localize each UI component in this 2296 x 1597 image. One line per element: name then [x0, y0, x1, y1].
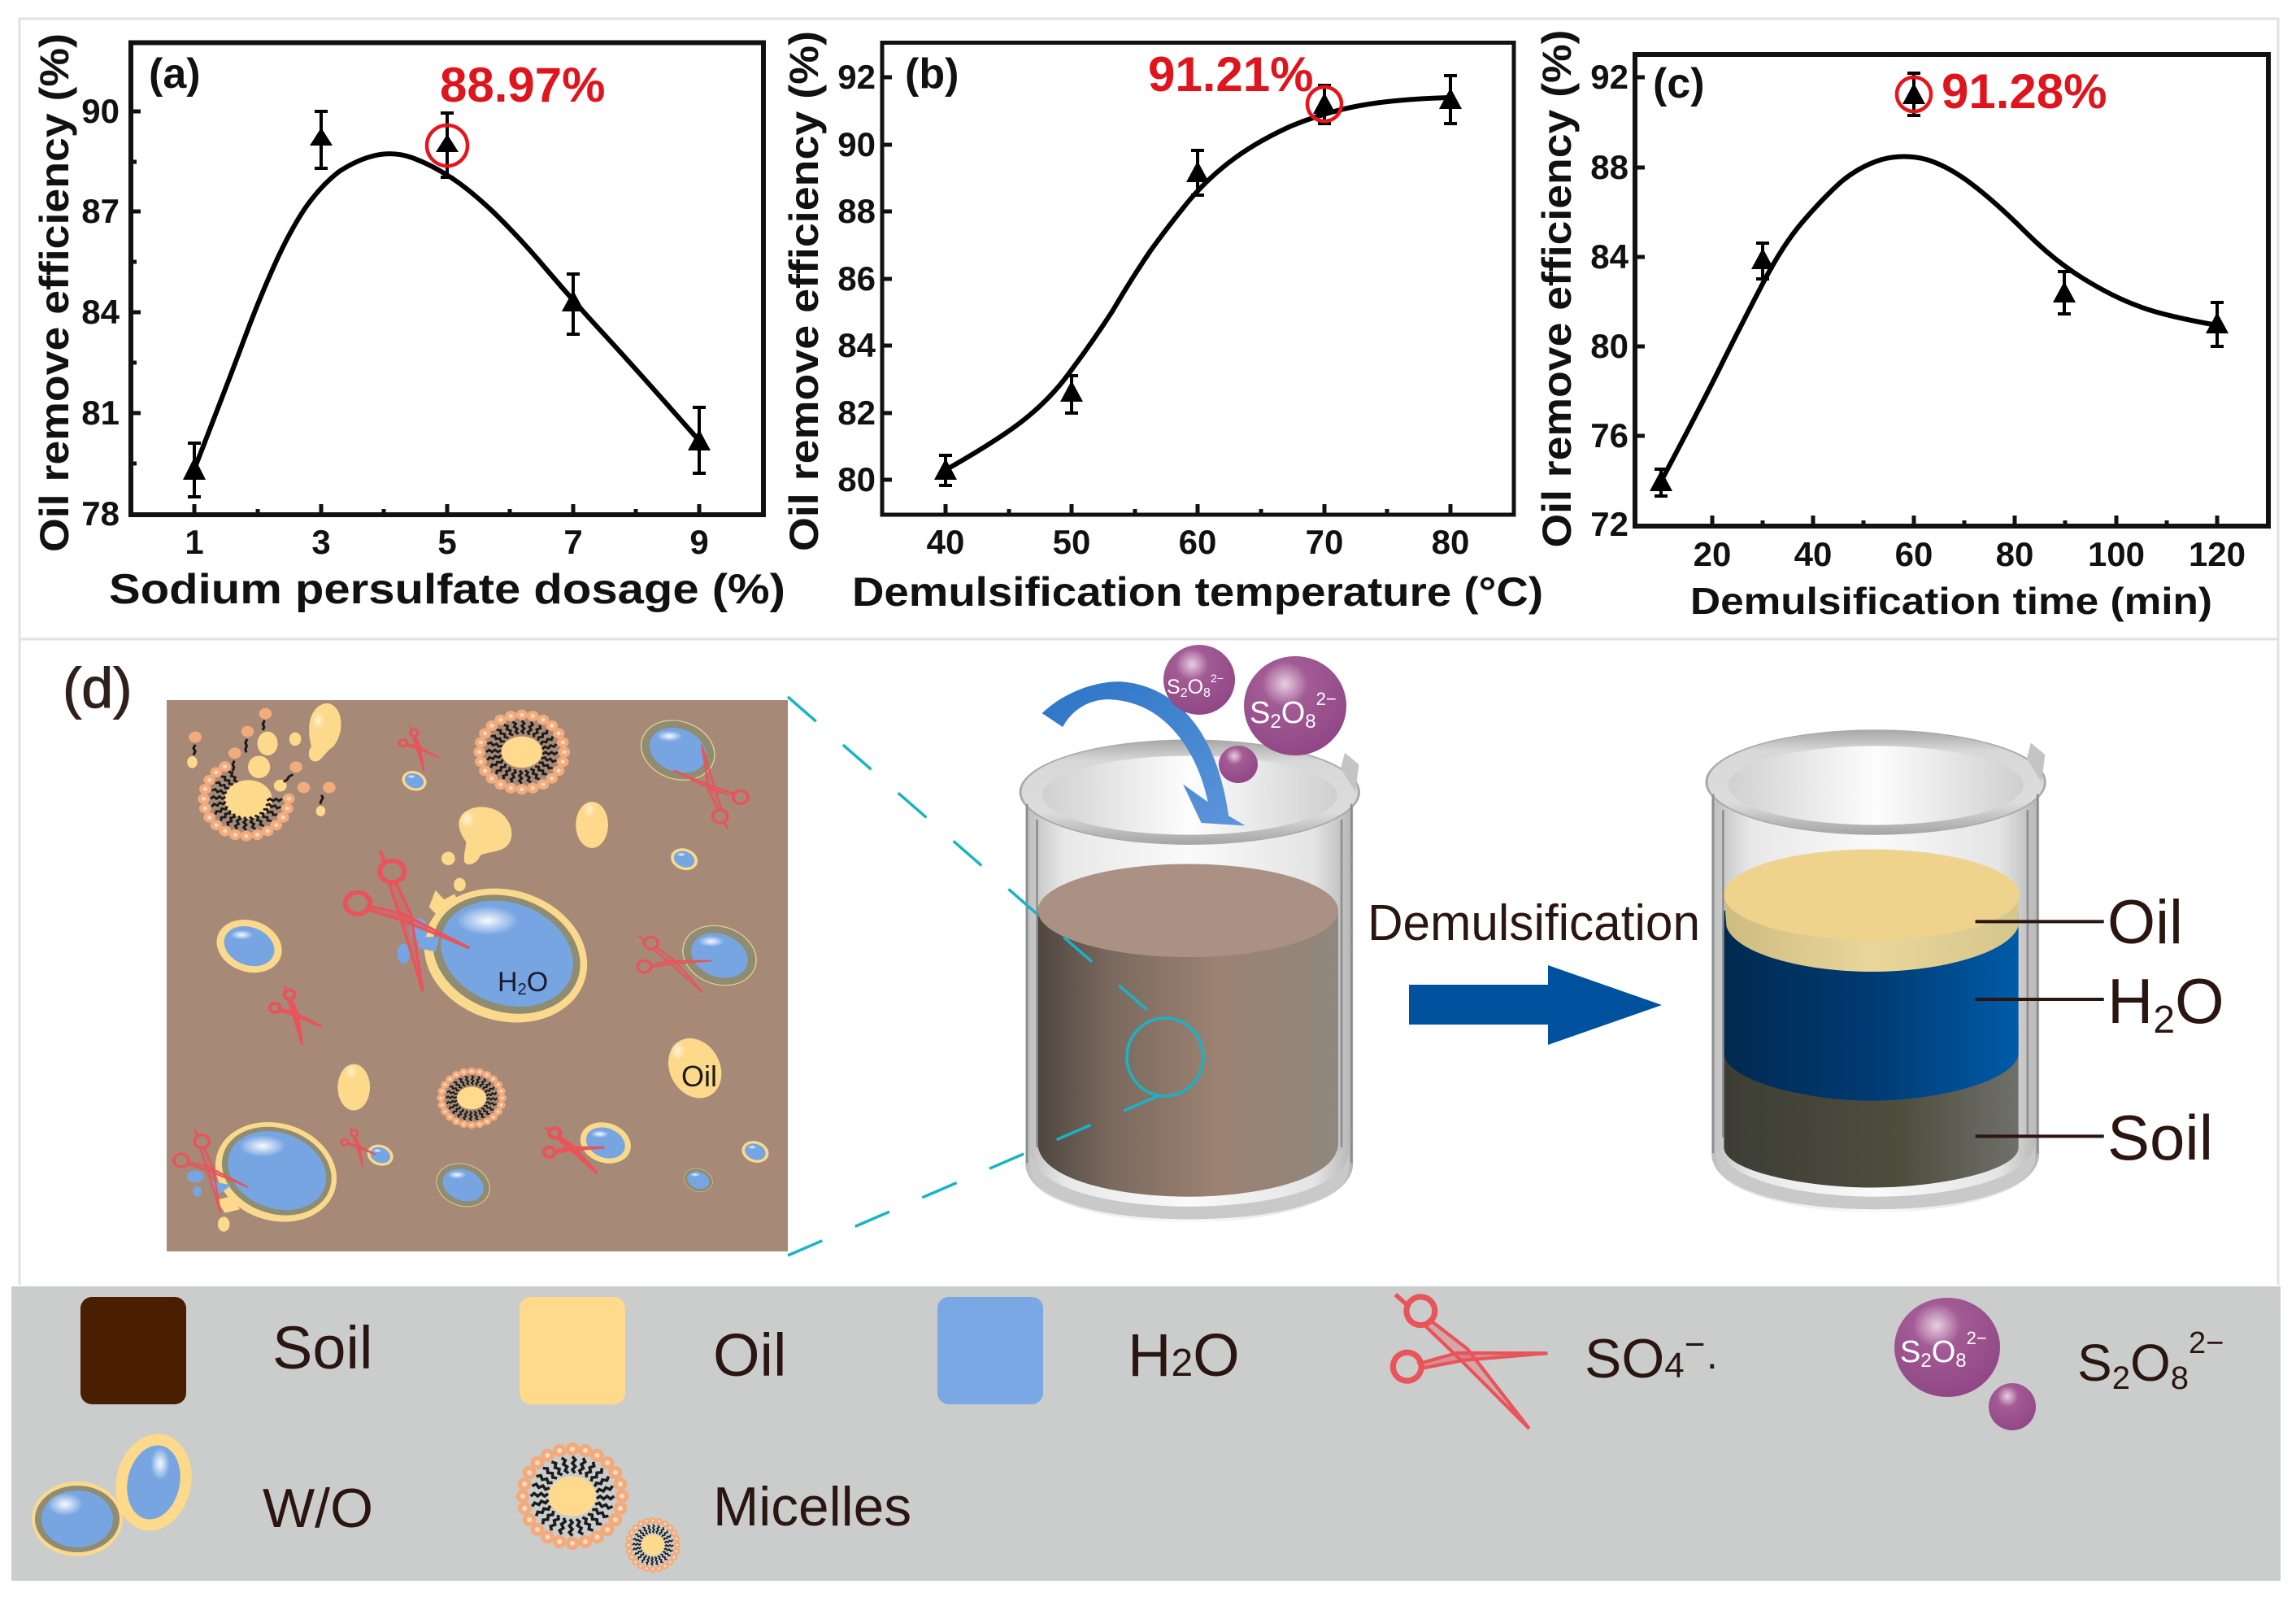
legend icon: persulfate spheres: S: [1900, 1335, 1920, 1369]
y tick labels (a): [81, 92, 120, 533]
legend icon: W/O droplets: [32, 1427, 200, 1556]
x tick labels (c): 80: [1996, 535, 2033, 573]
panel tag (d): (d): [63, 656, 133, 720]
y axis label (b): Oil remove efficiency (%): [781, 31, 827, 551]
y tick labels (a): 90: [81, 92, 120, 130]
oil layer: [1724, 894, 2019, 972]
legend text: W/O: W/O: [263, 1477, 373, 1539]
y tick labels (b): 80: [837, 460, 876, 498]
y tick labels (b): 92: [837, 58, 876, 96]
data markers (c): [1650, 83, 2229, 491]
legend text: oil: Oil: [713, 1321, 786, 1389]
data markers (a): [183, 128, 711, 480]
sphere: large: [1244, 656, 1346, 755]
soil background square: [167, 700, 788, 1251]
label: H2O in droplet: H: [498, 967, 518, 998]
y tick labels (a): 84: [81, 293, 120, 331]
fitted curve (b): [946, 98, 1450, 470]
legend text: water: H2O: [1128, 1321, 1240, 1389]
label: H2O layer: O: [2175, 965, 2224, 1037]
y tick labels (b): 86: [837, 259, 876, 298]
x tick labels (a): [185, 523, 709, 561]
panel: (b) demulsification temperature chart: [781, 31, 1543, 615]
x tick labels (b): 60: [1179, 523, 1216, 561]
x tick labels (b): 40: [927, 523, 964, 561]
y tick labels (a): 81: [81, 394, 120, 432]
y tick labels (c): 84: [1590, 237, 1629, 276]
legend icon: persulfate spheres: [1894, 1298, 2036, 1430]
legend icon: persulfate spheres: 2: [1920, 1350, 1932, 1372]
label: H2O layer: H: [2107, 965, 2153, 1037]
y tick labels (b): [837, 58, 876, 498]
y tick labels (c): 76: [1590, 416, 1629, 455]
legend icon: micelles: [515, 1443, 681, 1573]
legend icon: persulfate spheres: 2−: [1967, 1328, 1987, 1348]
error bars (c): [1655, 73, 2224, 496]
y tick labels (b): 90: [837, 125, 876, 163]
value callout (a): 88.97%: [440, 58, 605, 112]
legend text: sulfate radical: −: [1685, 1325, 1705, 1364]
legend text: soil: Soil: [272, 1314, 372, 1382]
x tick labels (a): 1: [185, 523, 204, 561]
beaker: emulsion with persulfate: [1020, 681, 1359, 1222]
plot frame (b): [882, 42, 1514, 515]
sphere: tiny: [1219, 746, 1258, 783]
sphere label large: 2: [1270, 711, 1281, 733]
emulsion particles: [174, 703, 773, 1242]
sphere label medium: 8: [1203, 686, 1211, 700]
highlight circle (a): [427, 125, 467, 166]
y axis label (a): Oil remove efficiency (%): [32, 33, 77, 552]
persulfate spheres: [1163, 645, 1346, 783]
y tick labels (a): 78: [81, 494, 120, 533]
legend text: persulfate: O: [2130, 1334, 2171, 1392]
panel tag (b): (b): [905, 50, 959, 98]
zoom lines and circle: [788, 697, 1203, 1255]
water layer: [1724, 911, 2019, 1101]
value callout (b): 91.21%: [1148, 47, 1314, 102]
sphere label medium: O: [1188, 676, 1203, 698]
x tick labels (c): 20: [1694, 535, 1731, 573]
sulfate radical scissors: [174, 726, 748, 1213]
value callout (c): 91.28%: [1942, 64, 2107, 119]
panel: microscopic emulsion view: [167, 700, 788, 1251]
soil layer: [1724, 1029, 2019, 1188]
y tick labels (c): 92: [1590, 58, 1629, 96]
x tick labels (b): [927, 523, 1469, 561]
fitted curve (c): [1661, 156, 2217, 481]
x tick labels (a): 9: [689, 523, 709, 561]
legend text: persulfate: 2−: [2189, 1326, 2224, 1360]
y axis label (c): Oil remove efficiency (%): [1534, 29, 1580, 548]
spilled water fragments: [187, 918, 440, 1197]
legend swatch: soil: [80, 1297, 186, 1404]
label: H2O layer: 2: [2153, 999, 2175, 1042]
sphere label large: 2−: [1316, 689, 1337, 709]
y tick labels (b): 82: [837, 394, 876, 432]
panel: (c) demulsification time chart: [1534, 29, 2268, 622]
sphere label large: S: [1250, 696, 1270, 730]
x axis label (a): Sodium persulfate dosage (%): [109, 566, 785, 613]
legend background: [11, 1286, 2281, 1581]
sphere label large: O: [1281, 696, 1305, 730]
fitted curve (a): [194, 154, 699, 469]
legend text: persulfate: 2: [2112, 1360, 2130, 1396]
y tick labels (a): 87: [81, 192, 120, 230]
label: Demulsification: Demulsification: [1368, 895, 1700, 951]
legend swatch: oil: [520, 1297, 625, 1404]
y tick labels (c): 88: [1590, 148, 1629, 186]
sphere: medium: [1163, 645, 1235, 715]
legend text: sulfate radical: ·: [1705, 1341, 1719, 1386]
sphere label medium: S: [1167, 676, 1181, 698]
error bars (b): [939, 76, 1457, 485]
panel tag (c): (c): [1653, 60, 1705, 107]
y tick labels (c): [1590, 58, 1629, 543]
label: Oil in droplet: Oil: [681, 1060, 717, 1093]
highlight circle (b): [1307, 87, 1342, 121]
sphere label medium: 2: [1181, 686, 1188, 700]
y tick labels (c): 72: [1590, 505, 1629, 543]
x tick labels (b): 80: [1432, 523, 1469, 561]
x tick labels (a): 5: [437, 523, 457, 561]
legend icon: persulfate spheres: 8: [1955, 1350, 1967, 1372]
y tick labels (b): 84: [837, 326, 876, 364]
label: Soil layer: Soil: [2107, 1102, 2213, 1173]
legend text: persulfate: 8: [2171, 1360, 2189, 1396]
free surfactant molecules: [189, 708, 336, 804]
plot frame (c): [1635, 54, 2268, 526]
label: H2O in droplet: 2: [518, 981, 527, 999]
x axis label (b): Demulsification temperature (°C): [852, 569, 1543, 615]
leader lines: [1976, 921, 2104, 1136]
oil droplet highlights: [312, 711, 685, 1079]
curved dosing arrow: [1042, 681, 1246, 825]
legend text: micelles: Micelles: [713, 1476, 911, 1538]
sphere label medium: 2−: [1211, 672, 1224, 685]
x tick labels (c): 120: [2189, 535, 2246, 573]
legend swatch: water: [937, 1297, 1043, 1404]
panel: (a) sodium persulfate dosage chart: [32, 33, 785, 613]
x tick labels (b): 70: [1306, 523, 1343, 561]
legend icon: scissors: [1361, 1243, 1576, 1473]
data markers (b): [934, 88, 1462, 480]
water droplets with film: [194, 708, 773, 1242]
x tick labels (c): 60: [1895, 535, 1933, 573]
sphere label large: 8: [1305, 711, 1316, 733]
beaker: separated layers: [1707, 730, 2104, 1212]
label: H2O in droplet: O: [527, 967, 548, 998]
legend panel: [11, 1243, 2281, 1581]
plot frame (a): [131, 42, 763, 515]
x tick labels (c): 100: [2088, 535, 2145, 573]
emulsion liquid: [1038, 911, 1338, 1197]
legend text: persulfate: S: [2077, 1334, 2112, 1392]
y tick labels (b): 88: [837, 192, 876, 230]
legend icon: persulfate spheres: O: [1932, 1335, 1955, 1369]
error bars (a): [188, 111, 706, 497]
x tick labels (c): 40: [1794, 535, 1832, 573]
x tick labels (a): 3: [311, 523, 331, 561]
x tick labels (b): 50: [1053, 523, 1090, 561]
x tick labels (c): [1694, 535, 2246, 573]
x tick labels (a): 7: [563, 523, 583, 561]
highlight circle (c): [1897, 77, 1931, 111]
x axis label (c): Demulsification time (min): [1690, 580, 2212, 622]
micelles: [198, 710, 570, 1129]
oil droplets: [187, 703, 730, 1232]
y tick labels (c): 80: [1590, 327, 1629, 365]
label: Oil layer: Oil: [2107, 888, 2183, 957]
panel tag (a): (a): [149, 50, 201, 98]
legend text: sulfate radical: SO4: [1585, 1328, 1685, 1390]
process arrow: [1409, 965, 1662, 1045]
